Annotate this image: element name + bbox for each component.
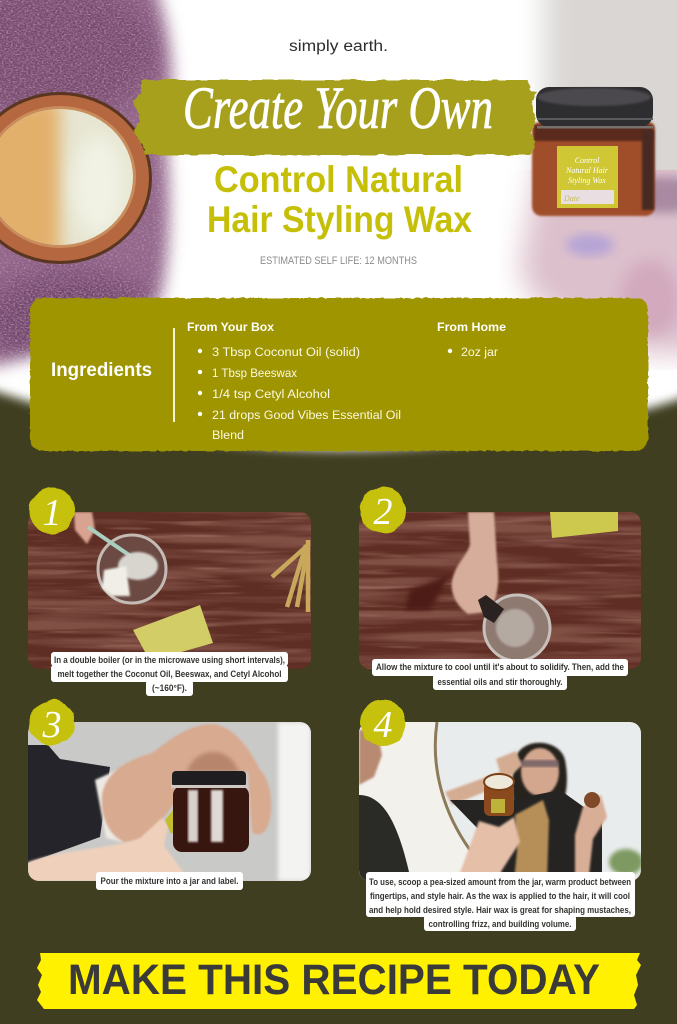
jar label: Styling Wax xyxy=(568,176,606,185)
column: from your box: 1 Tbsp Beeswax xyxy=(212,366,297,380)
jar label: Control xyxy=(575,156,600,165)
step 4 badge: 4 xyxy=(374,704,392,746)
header photo: knit cloth with wax jar xyxy=(0,0,184,377)
step 4 caption: To use, scoop a pea-sized amount from the jar, warm product between xyxy=(369,876,631,887)
step 3 badge xyxy=(29,700,75,746)
title banner xyxy=(133,75,537,155)
call to action banner xyxy=(37,953,641,1009)
column: from home xyxy=(437,320,506,359)
step 2 photo: adding essential oil xyxy=(359,512,641,669)
column: from your box: Blend xyxy=(212,428,244,442)
jar label: Natural Hair xyxy=(565,166,609,175)
step 1 badge xyxy=(29,488,75,534)
logo: simply earth: simply earth. xyxy=(289,38,388,55)
column: from your box: From Your Box xyxy=(187,320,274,334)
icon: open wax jar xyxy=(0,92,152,264)
step 4 photo: using wax in mirror xyxy=(359,722,643,881)
column: from home: 2oz jar xyxy=(461,345,498,359)
step 2 caption xyxy=(372,659,628,690)
jar label: Date xyxy=(563,194,580,203)
step 4 caption: controlling frizz, and building volume. xyxy=(428,918,572,929)
recipe name: Control Natural xyxy=(214,159,463,200)
ingredients heading: Ingredients xyxy=(51,360,152,381)
call to action text: MAKE THIS RECIPE TODAY xyxy=(68,957,600,1004)
step 1 badge: 1 xyxy=(42,492,62,534)
title: Create Your Own xyxy=(183,75,493,141)
step 2 caption: essential oils and stir thoroughly. xyxy=(438,676,562,687)
icon: labelled wax jar xyxy=(532,87,655,216)
panel: ingredients xyxy=(30,298,648,451)
shelf life note: ESTIMATED SELF LIFE: 12 MONTHS xyxy=(260,255,417,267)
recipe name xyxy=(207,159,472,240)
recipe name: Hair Styling Wax xyxy=(207,199,472,240)
header white arc xyxy=(0,0,677,450)
step 1 photo: bowl on wooden table xyxy=(28,512,311,669)
column: from your box: 21 drops Good Vibes Essential Oil xyxy=(212,408,401,422)
column: from your box: 3 Tbsp Coconut Oil (solid) xyxy=(212,345,360,359)
step 1 caption: In a double boiler (or in the microwave using short intervals), xyxy=(54,654,285,665)
step 1 caption xyxy=(51,652,288,696)
step 3 photo: labelling jar xyxy=(28,722,311,881)
step 4 caption xyxy=(366,872,635,931)
step 4 caption: fingertips, and style hair. As the wax is applied to the hair, it will cool xyxy=(370,890,630,901)
step 2 badge: 2 xyxy=(374,491,392,533)
column: from your box: 1/4 tsp Cetyl Alcohol xyxy=(212,387,330,401)
step 2 caption: Allow the mixture to cool until it's about to solidify. Then, add the xyxy=(376,661,624,672)
step 3 badge: 3 xyxy=(42,704,62,746)
step 1 caption: melt together the Coconut Oil, Beeswax, and Cetyl Alcohol xyxy=(58,668,282,679)
column: from home: From Home xyxy=(437,320,506,334)
jar label xyxy=(557,146,618,208)
step 4 badge xyxy=(360,700,406,746)
step 2 badge xyxy=(360,487,406,533)
step 3 caption xyxy=(96,872,243,890)
step 1 caption: (~160°F). xyxy=(152,682,187,693)
step 4 caption: and help hold desired style. Hair wax is great for shaping mustaches, xyxy=(369,904,631,915)
step 3 caption: Pour the mixture into a jar and label. xyxy=(100,875,238,886)
column: from your box xyxy=(187,320,401,442)
